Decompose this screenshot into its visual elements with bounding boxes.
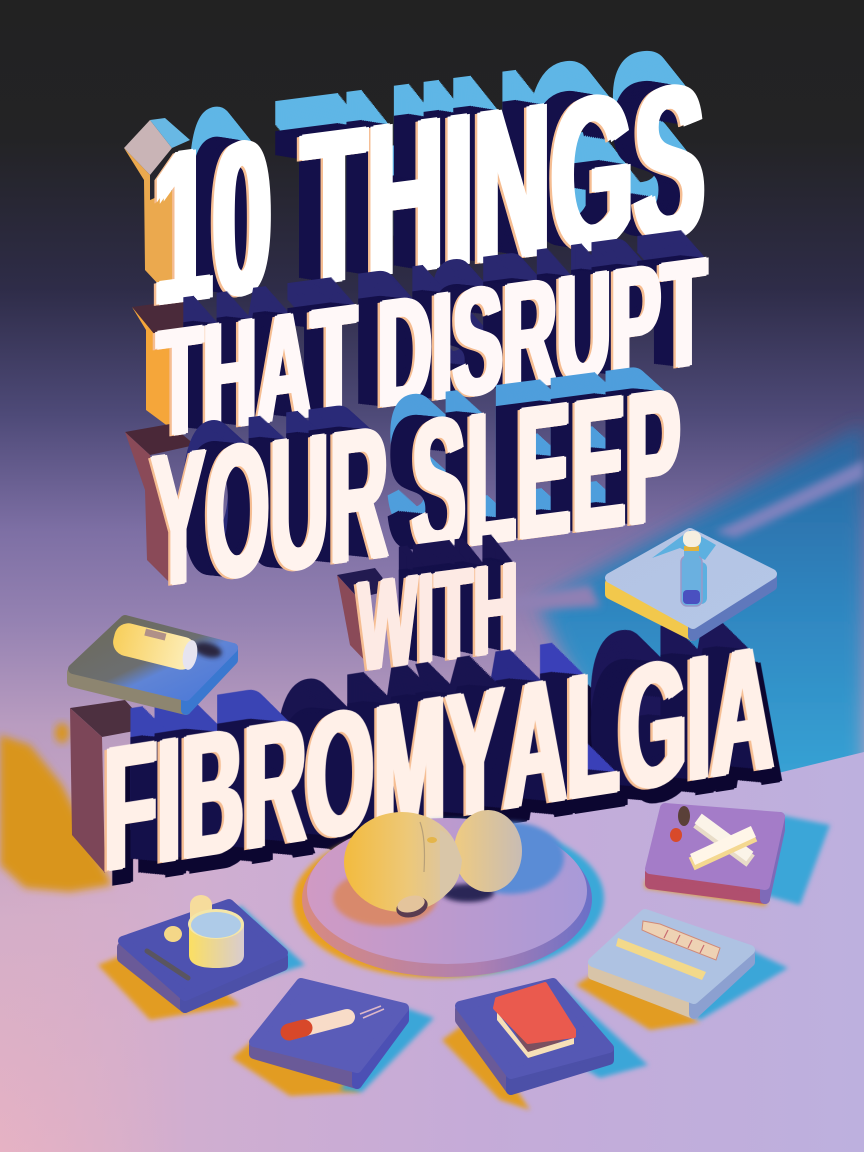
- tile: cross and pills: [645, 806, 830, 906]
- side: letter W: [337, 568, 392, 668]
- title line: THAT DISRUPT: THAT DISRUPT: [157, 225, 707, 470]
- side: letter T: [132, 299, 212, 430]
- icon: floating pad with capsule: [72, 620, 233, 710]
- side: numeral 1: [124, 118, 190, 300]
- tile: cigarette: [232, 983, 434, 1096]
- title line: FIBROMYALGIA: FIBROMYALGIA: [104, 607, 774, 909]
- title line: WITH: WITH: [358, 535, 518, 699]
- tile: thermometer and bar: [576, 914, 788, 1030]
- side: letter Y: [125, 424, 195, 585]
- title line: 10 THINGS: 10 THINGS: [153, 37, 705, 352]
- side: letter F: [70, 700, 150, 873]
- title line: YOUR SLEEP: YOUR SLEEP: [151, 348, 681, 628]
- icon: sleeping head on plate: [344, 810, 522, 921]
- tile: red book: [442, 983, 648, 1110]
- icon: round plate: [293, 818, 604, 978]
- icon: floating pad with vial: [610, 530, 772, 636]
- tile: cup and pills: [98, 895, 305, 1020]
